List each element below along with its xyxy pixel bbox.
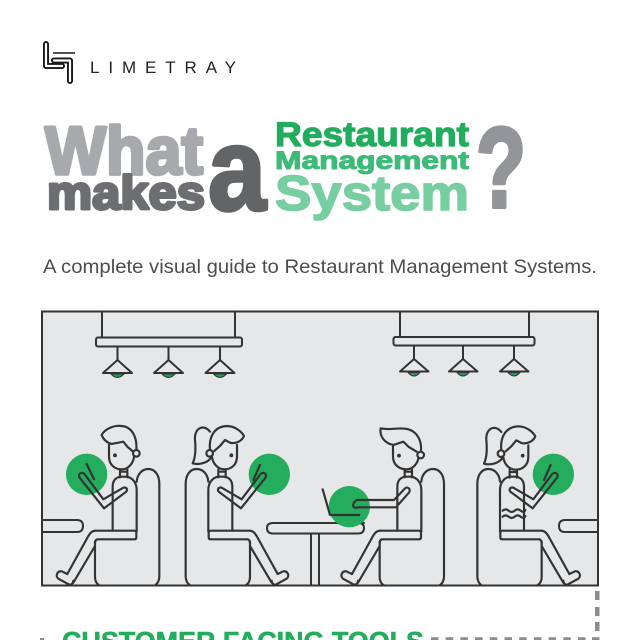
title words: Restaurant Management System: System [275,167,469,221]
logo wordmark: LIMETRAY [90,58,236,77]
title words: Restaurant Management System: Management [275,147,470,175]
person 3: man with laptop [323,428,444,585]
figure [186,426,288,585]
scene background [42,312,598,586]
title words: Restaurant Management System: Restaurant [275,116,469,154]
title words: What makes a: What [45,113,203,189]
highlight circle [533,454,574,495]
highlight circle [249,454,290,495]
figure [57,426,159,585]
logo: Limetray [46,44,236,81]
highlight circle [66,454,107,495]
highlight circle [329,486,370,527]
figure [477,426,580,585]
table centre with laptop stand [267,523,364,585]
table right [559,520,597,532]
title words: What makes a: a [208,104,267,236]
title words: Restaurant Management System [275,116,470,221]
ceiling lamps left [96,312,242,378]
title words: What makes a: makes [47,166,205,219]
title question mark: ? [476,105,526,232]
person 1: man with phone [57,426,159,585]
title [45,104,526,236]
ceiling lamps right [394,312,534,376]
title words: What makes a [45,104,267,236]
person 2: woman with phone [186,426,290,585]
dashed connector [40,591,600,640]
panel: restaurant scene [42,312,598,586]
figure [323,428,444,585]
icon: Limetray mark [46,44,75,81]
table left [43,520,83,532]
subtitle: A complete visual guide to Restaurant Management Systems. [43,256,597,278]
person 4: woman with phone [477,426,580,585]
